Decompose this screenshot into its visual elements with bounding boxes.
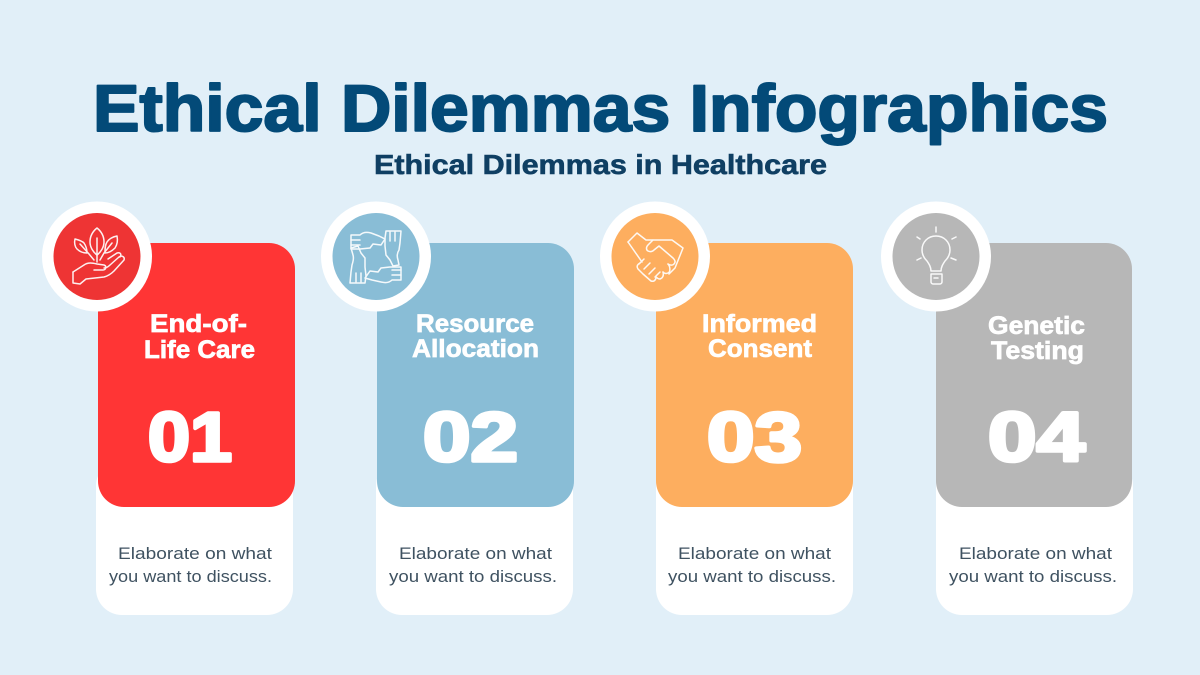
heading 4: Testing (991, 337, 1084, 365)
description card 1: Elaborate on what (118, 544, 272, 563)
icon: handshake (600, 202, 710, 312)
description card 2 (376, 460, 573, 615)
heading 2 (412, 310, 539, 363)
title: Ethical Dilemmas Infographics (93, 71, 1108, 145)
heading 3 (702, 310, 817, 363)
colored card 2 (377, 243, 574, 507)
heading 2: Allocation (412, 335, 539, 363)
panel: Genetic Testing (881, 202, 1133, 615)
heading 1 (144, 310, 255, 364)
description card 3: Elaborate on what (678, 544, 831, 563)
number 03: 03 (707, 398, 802, 476)
description card 3 (656, 460, 853, 615)
description card 4 (936, 460, 1133, 615)
heading 1: Life Care (144, 336, 255, 364)
description card 4: Elaborate on what (959, 544, 1112, 563)
heading 2: Resource (416, 310, 534, 338)
colored card 1 (98, 243, 295, 507)
number 04: 04 (988, 398, 1085, 476)
heading 4 (988, 312, 1085, 365)
description card 4: you want to discuss. (949, 567, 1117, 586)
heading 4: Genetic (988, 312, 1085, 340)
panel: Resource Allocation (321, 202, 574, 615)
description card 2: you want to discuss. (389, 567, 557, 586)
description card 1: you want to discuss. (109, 567, 272, 586)
colored card 4 (936, 243, 1132, 507)
number 02: 02 (423, 398, 518, 476)
heading 3: Consent (708, 335, 813, 363)
panel: Informed Consent (600, 202, 853, 615)
heading 1: End-of- (150, 310, 247, 338)
panel: End-of-Life Care (42, 202, 295, 615)
subtitle: Ethical Dilemmas in Healthcare (374, 149, 827, 180)
icon: light bulb (881, 202, 991, 312)
icon: four interlocked hands (321, 202, 431, 312)
heading 3: Informed (702, 310, 817, 338)
description card 2: Elaborate on what (399, 544, 552, 563)
description card 1 (96, 460, 293, 615)
description card 3: you want to discuss. (668, 567, 836, 586)
number 01: 01 (148, 398, 232, 476)
icon: hand with plant (42, 202, 152, 312)
colored card 3 (656, 243, 853, 507)
